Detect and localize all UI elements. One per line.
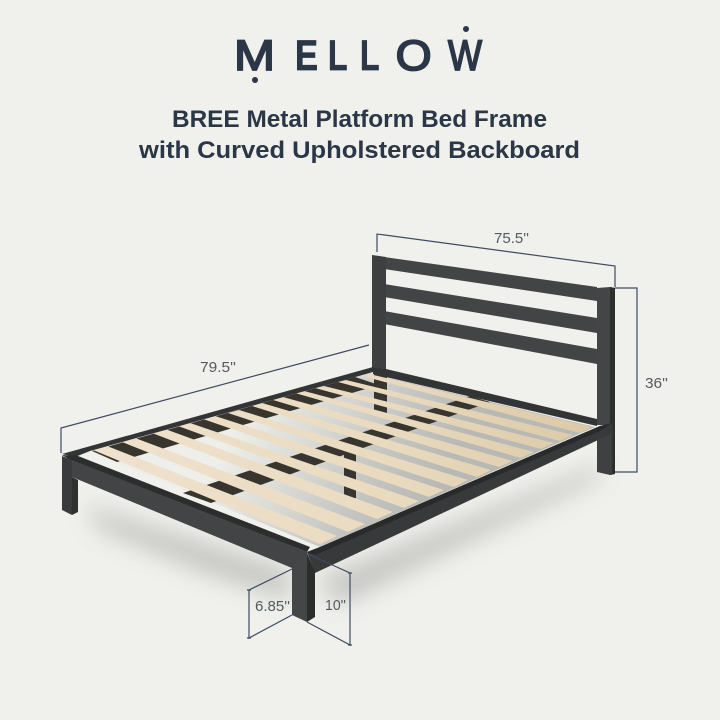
dimension: headboard width 75.5: 75.5'' — [494, 230, 529, 247]
slat supports — [92, 374, 490, 503]
heading — [138, 106, 580, 164]
deck opening — [90, 372, 595, 547]
front leg — [292, 553, 315, 622]
left side rail — [62, 455, 310, 552]
dimension: leg clearance 6.85: 6.85'' — [255, 598, 290, 615]
left leg — [62, 456, 78, 515]
logo: MELLOW: M — [234, 32, 275, 80]
logo: MELLOW: O — [396, 32, 432, 80]
far side rail — [62, 367, 373, 457]
dimension: length 79.5 — [61, 345, 369, 453]
dimension: height 36: 36'' — [645, 375, 668, 392]
dimension: height 36 — [615, 288, 668, 472]
logo: MELLOW: L — [328, 32, 348, 80]
left headboard post — [372, 255, 386, 372]
heading: BREE Metal Platform Bed Frame — [172, 106, 547, 133]
logo: MELLOW: L — [360, 32, 380, 80]
bed frame illustration — [62, 255, 615, 622]
dimension: length 79.5: 79.5'' — [200, 359, 236, 376]
right headboard post — [597, 287, 615, 425]
dimension: headboard width 75.5 — [377, 230, 615, 287]
rear bed leg — [597, 430, 612, 475]
headboard bars — [384, 257, 597, 364]
logo: MELLOW: W — [448, 32, 482, 80]
floor shadow — [85, 465, 600, 605]
right side rail — [307, 423, 613, 573]
logo: MELLOW: E — [295, 32, 318, 80]
dimension: frame height 10 — [307, 554, 352, 645]
heading: with Curved Upholstered Backboard — [138, 137, 580, 164]
dimension: frame height 10: 10'' — [325, 597, 346, 614]
wooden slats — [93, 373, 592, 544]
back rail — [373, 368, 597, 426]
dimension: leg clearance 6.85 — [247, 569, 292, 638]
headboard — [372, 255, 615, 475]
logo: MELLOW — [234, 26, 482, 83]
